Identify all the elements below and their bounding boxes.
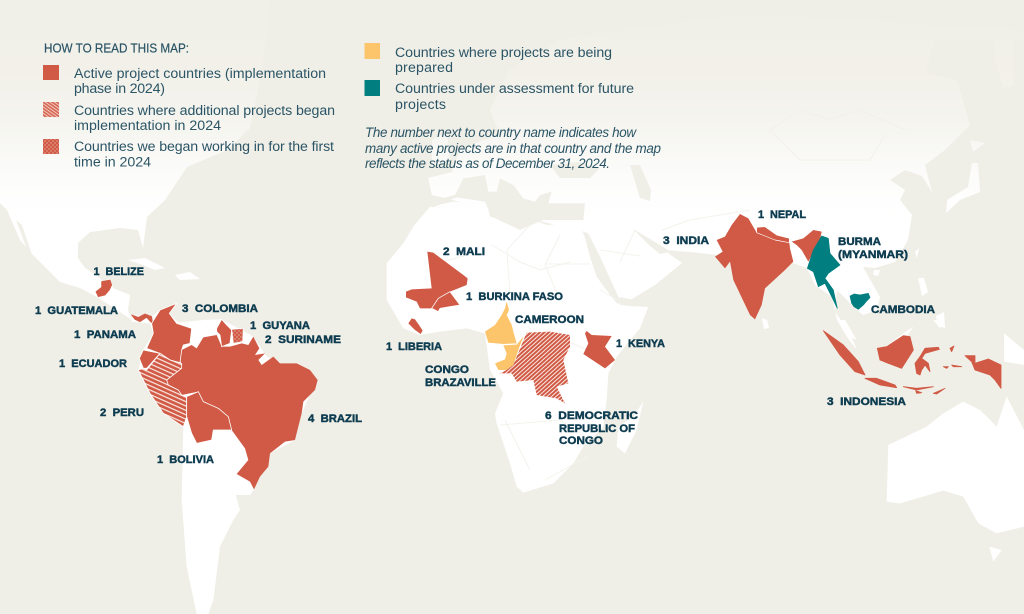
legend item: additional projects: Countries where additional projects began (74, 103, 335, 119)
region: Central and South American countries (96, 280, 318, 489)
label: India: 3 INDIA (663, 235, 709, 247)
country: Cambodia (850, 293, 870, 309)
country: Belize and Guatemala (96, 280, 112, 297)
legend item: projects being prepared: Countries where projects are being (395, 45, 612, 61)
label: Peru: 2 PERU (100, 407, 144, 419)
sea: Gulf of Aden (620, 262, 700, 320)
landmass: Australia and islands (838, 320, 1024, 562)
landmass: Eurasia (428, 15, 1024, 350)
legend item: first time countries: Countries we began working in for the first (74, 139, 334, 155)
sea: Persian Gulf (633, 229, 670, 254)
landmass: Africa (387, 202, 648, 493)
label: Cambodia: CAMBODIA (871, 304, 935, 316)
legend note: The number next to country name indicates how (365, 125, 637, 140)
legend item: projects being prepared (364, 43, 612, 76)
sea: Red Sea (583, 232, 622, 301)
label: Cameroon: CAMEROON (515, 314, 584, 326)
legend item: first time countries (43, 139, 334, 170)
label: Guyana: 1 GUYANA (250, 320, 310, 332)
label: Bolivia: 1 BOLIVIA (157, 454, 214, 466)
sea: Mediterranean (420, 175, 585, 230)
legend item: under assessment (364, 80, 634, 113)
label: Democratic Republic of Congo: 6 DEMOCRATIC (545, 410, 638, 422)
sea: Black Sea (550, 162, 600, 178)
country: Suriname (232, 328, 243, 343)
country: Peru (138, 353, 187, 427)
country: Nepal (757, 227, 789, 243)
label: Democratic Republic of Congo: CONGO (559, 435, 603, 447)
country: Liberia (408, 318, 423, 334)
fade of northern landmasses into background (0, 0, 1024, 218)
country: India (715, 214, 822, 319)
label: Congo Brazzaville (425, 364, 496, 389)
country: Ecuador (139, 350, 160, 368)
country: Burkina Faso (432, 292, 460, 312)
label: Burma (Myanmar) (838, 236, 908, 261)
country labels (35, 209, 935, 466)
legend item: additional projects: implementation in 2024 (74, 118, 221, 134)
legend item: active project countries: phase in 2024) (74, 81, 165, 97)
legend heading: HOW TO READ THIS MAP: (44, 40, 189, 56)
legend item: under assessment: projects (395, 97, 446, 113)
label: Suriname: 2 SURINAME (265, 334, 341, 346)
label: Indonesia: 3 INDONESIA (827, 396, 906, 408)
country: Kenya (583, 331, 615, 368)
label: Burma (Myanmar): BURMA (838, 236, 881, 248)
label: Colombia: 3 COLOMBIA (182, 303, 258, 315)
label: Nepal: 1 NEPAL (758, 209, 806, 221)
country: Cameroon (485, 302, 517, 344)
legend: left column (43, 40, 335, 170)
legend item: first time countries: time in 2024 (74, 154, 151, 170)
country: Panama (132, 314, 153, 324)
legend note: many active projects are in that country and the map (365, 141, 662, 156)
country: Bolivia (187, 392, 232, 443)
label: Democratic Republic of Congo: REPUBLIC OF (559, 423, 635, 435)
landmass: Hispaniola (175, 272, 200, 280)
label: Belize: 1 BELIZE (94, 266, 144, 278)
label: Brazil: 4 BRAZIL (308, 413, 362, 425)
faint country borders (430, 110, 905, 480)
legend item: under assessment: Countries under assessment for future (395, 81, 634, 97)
landmass: Cuba (128, 258, 165, 270)
label: Congo Brazzaville: CONGO (425, 364, 469, 376)
region: Asian countries (715, 214, 1001, 394)
label: Mali: 2 MALI (443, 246, 485, 258)
label: Burma (Myanmar): (MYANMAR) (838, 249, 908, 261)
legend note (365, 125, 662, 171)
label: Congo Brazzaville: BRAZAVILLE (425, 377, 496, 389)
country: Mali (406, 252, 468, 308)
region: African countries (406, 252, 615, 403)
label: Democratic Republic of Congo (545, 410, 638, 447)
legend item: projects being prepared: prepared (395, 60, 453, 76)
sea: Caspian (630, 165, 651, 201)
country: Colombia (147, 303, 192, 363)
label: Kenya: 1 KENYA (616, 338, 665, 350)
landmass: North America (0, 0, 270, 320)
country: Brazil (167, 335, 318, 489)
seas: Mediterranean, Black Sea, Caspian, Red Sea, Gulf (16, 162, 700, 320)
country: Guyana (217, 319, 232, 347)
legend item: additional projects (43, 102, 335, 134)
landmass: South America (132, 303, 317, 614)
label: Burkina Faso: 1 BURKINA FASO (466, 291, 563, 303)
label: Ecuador: 1 ECUADOR (59, 358, 127, 370)
label: Guatemala: 1 GUATEMALA (35, 305, 118, 317)
country: Democratic Republic of Congo (499, 332, 570, 403)
country: Congo Brazzaville (495, 337, 523, 370)
landmass: Japan, Taiwan, Philippines, Sri Lanka, UK (946, 163, 980, 213)
legend: right column (364, 43, 662, 171)
label: Panama: 1 PANAMA (74, 329, 136, 341)
legend item: active project countries: Active project countries (implementation (74, 66, 326, 82)
label: Liberia: 1 LIBERIA (386, 341, 442, 353)
sea: Gulf of California (16, 220, 32, 255)
country: Burma (Myanmar) (807, 236, 840, 308)
legend item: active project countries (43, 65, 326, 97)
country: Indonesia (823, 331, 1001, 394)
legend note: reflects the status as of December 31, 2024. (365, 156, 610, 171)
